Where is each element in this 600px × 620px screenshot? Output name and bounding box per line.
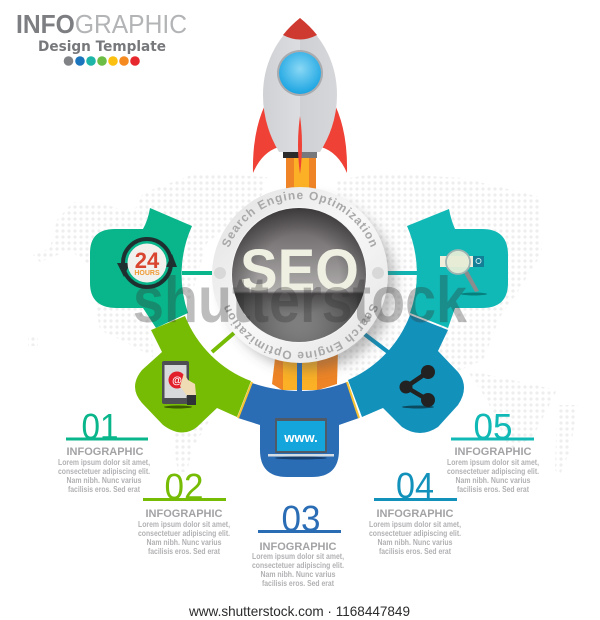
colour dots	[64, 56, 140, 66]
text 04: INFOGRAPHIC	[376, 508, 454, 520]
text 05: Nam nibh. Nunc varius	[456, 476, 531, 485]
panel: segment 04 blue-teal	[348, 315, 464, 433]
icon: 24 hours: 24	[135, 248, 160, 273]
text 04	[369, 508, 461, 556]
text 01: INFOGRAPHIC	[66, 446, 144, 458]
icon: laptop www	[268, 418, 334, 460]
block 04	[369, 465, 461, 556]
footer credit: www.shutterstock.com · 1168447849	[188, 603, 410, 619]
panel: segment 02 green	[135, 316, 251, 433]
hub shadow	[223, 198, 395, 370]
text 03	[252, 541, 344, 588]
ring text top: Search Engine Optimization	[222, 192, 376, 247]
text 05: facilisis eros. Sed erat	[457, 485, 529, 494]
text 01: consectetuer adipiscing elit.	[58, 467, 150, 476]
rocket centre spike	[298, 116, 302, 174]
text 02: consectetuer adipiscing elit.	[138, 529, 230, 538]
ring bolt left	[214, 267, 226, 279]
text 05: INFOGRAPHIC	[454, 446, 532, 458]
SEO heading: SEO	[240, 238, 359, 303]
icon: phone with at sign	[162, 361, 196, 408]
text 03: INFOGRAPHIC	[260, 541, 337, 553]
number 05: 05	[474, 406, 512, 447]
text 02: Lorem ipsum dolor sit amet,	[138, 520, 230, 529]
text 03: facilisis eros. Sed erat	[262, 579, 334, 588]
text 05: Lorem ipsum dolor sit amet,	[447, 458, 539, 467]
text 03: consectetuer adipiscing elit.	[252, 561, 344, 570]
text 03: Nam nibh. Nunc varius	[260, 570, 336, 579]
number 02: 02	[164, 466, 204, 507]
dotted world map background	[28, 173, 578, 475]
block 01	[58, 406, 150, 494]
text 03: Lorem ipsum dolor sit amet,	[252, 552, 344, 561]
title: INFOGRAPHIC: INFOGRAPHIC	[16, 9, 187, 39]
text 02: INFOGRAPHIC	[146, 508, 223, 520]
text 02	[138, 508, 230, 556]
text 05: consectetuer adipiscing elit.	[447, 467, 539, 476]
connector lines	[182, 273, 417, 352]
watermark: shutterstock	[133, 263, 468, 336]
number 03: 03	[282, 498, 320, 539]
flame below the hub	[272, 350, 338, 392]
block 05	[447, 406, 539, 494]
panel: segment 01 green-teal	[90, 208, 192, 328]
text 04: Nam nibh. Nunc varius	[378, 538, 453, 547]
ring bolt right	[372, 267, 384, 279]
block 03	[252, 498, 344, 588]
number 04: 04	[396, 465, 434, 506]
icon: phone with at sign: @	[172, 376, 182, 386]
text 04: consectetuer adipiscing elit.	[369, 529, 461, 538]
icon: 24 hours: HOURS	[134, 270, 160, 277]
rocket hull	[263, 18, 337, 152]
subtitle: Design Template: Design Template	[38, 39, 166, 55]
hub ring	[212, 187, 388, 363]
text 02: facilisis eros. Sed erat	[148, 547, 220, 556]
rocket window	[277, 50, 323, 96]
text 04: Lorem ipsum dolor sit amet,	[369, 520, 461, 529]
panel: segment 03 blue	[238, 382, 359, 477]
block 02	[138, 466, 230, 556]
rocket nozzle	[283, 152, 317, 158]
text 01: facilisis eros. Sed erat	[68, 485, 140, 494]
number 01: 01	[82, 406, 118, 447]
rocket flame	[286, 158, 316, 190]
text 05	[447, 446, 539, 494]
rocket left fin	[253, 99, 279, 173]
text 01	[58, 446, 150, 494]
hub dark disc	[231, 207, 367, 343]
text 02: Nam nibh. Nunc varius	[146, 538, 222, 547]
panel: segment 05 teal	[407, 209, 508, 328]
panel: SEO hub	[212, 187, 388, 363]
icon: 24 hours	[117, 239, 177, 287]
text 01: Nam nibh. Nunc varius	[66, 476, 142, 485]
rocket	[253, 18, 347, 190]
rocket right fin	[321, 99, 347, 173]
header logo	[16, 9, 187, 66]
ring text bottom: Search Engine Optimization	[224, 304, 378, 360]
text 01: Lorem ipsum dolor sit amet,	[58, 458, 150, 467]
icon: share	[400, 365, 435, 408]
text 04: facilisis eros. Sed erat	[379, 547, 451, 556]
icon: magnifier search	[440, 250, 487, 296]
icon: laptop www: www.	[283, 430, 318, 445]
rocket nose	[283, 18, 317, 40]
